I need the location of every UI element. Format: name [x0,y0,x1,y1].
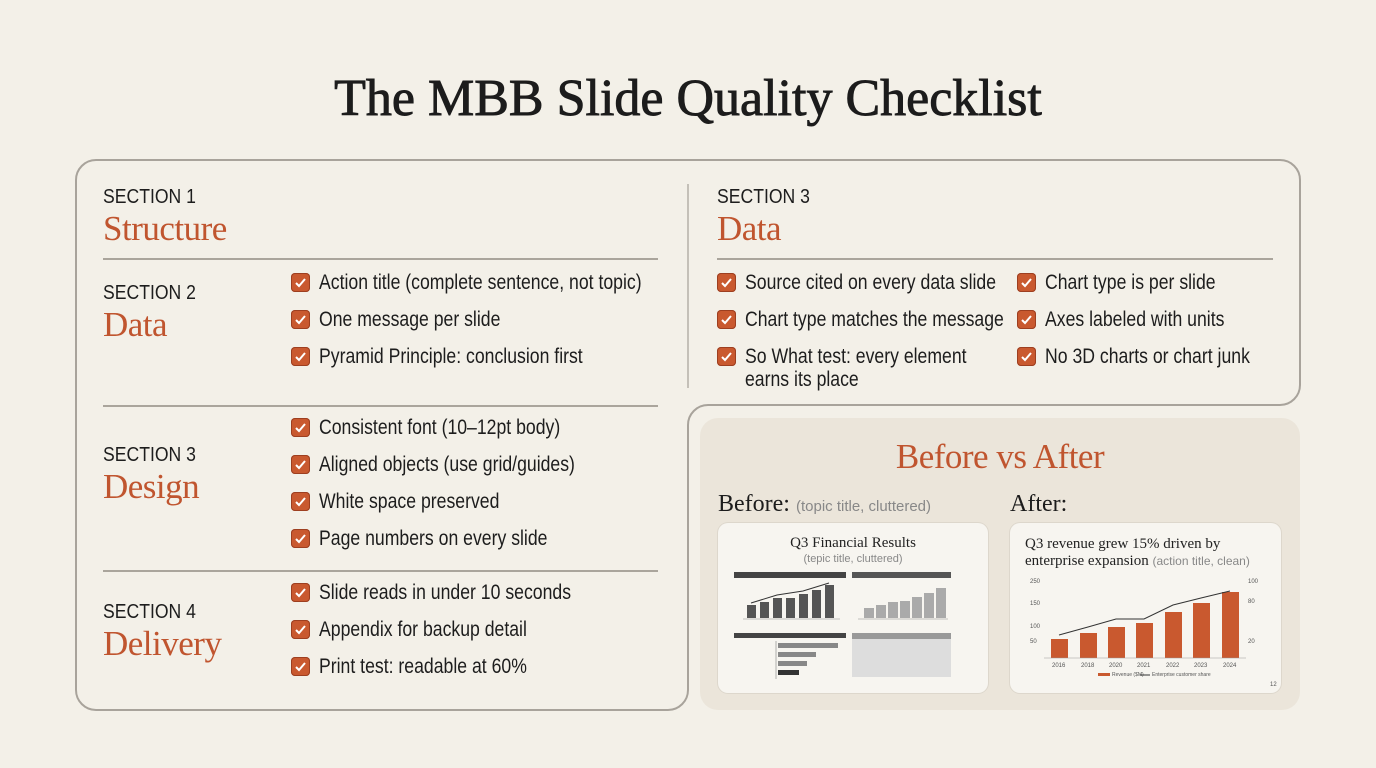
section 2 heading [103,282,196,344]
section 4 items [291,581,571,678]
section 4 items: Appendix for backup detail [319,618,527,641]
card: after slide: Revenue ($M) [1112,672,1144,678]
panel: before vs after [700,418,1300,710]
card: after slide: Enterprise customer share [1152,672,1211,678]
card: after slide: 250 [1030,579,1041,585]
section 2 heading: Data [103,305,167,344]
card: after slide: 2020 [1109,663,1123,669]
card: after slide: 100 [1248,579,1259,585]
section 2 items: Action title (complete sentence, not topic) [319,271,642,294]
card: after slide: 80 [1248,599,1255,605]
section 3 data heading: SECTION 3 [717,186,810,208]
section 1 heading: SECTION 1 [103,186,196,208]
card: after slide: 2018 [1081,663,1095,669]
section 3 design items: Aligned objects (use grid/guides) [319,453,575,476]
card: after slide: enterprise expansion (action title, clean) [1025,553,1250,569]
card: after slide: 2022 [1166,663,1180,669]
card: after slide: 12 [1270,682,1277,688]
section 4 heading [103,601,222,663]
section 3 data items: Chart type matches the message [745,308,1004,331]
card: after slide: 2021 [1137,663,1151,669]
after label: After: [1010,491,1067,517]
section 4 heading: SECTION 4 [103,601,196,623]
before vs after heading: Before vs After [896,437,1104,476]
card: after slide: 150 [1030,601,1041,607]
section 3 design items: Consistent font (10–12pt body) [319,416,560,439]
section 3 data heading [717,186,810,248]
section 3 design heading: SECTION 3 [103,444,196,466]
section 3 data items: Axes labeled with units [1045,308,1224,331]
card: before slide [718,523,988,693]
section 3 data items: Source cited on every data slide [745,271,996,294]
section 2 items [291,271,642,368]
section 2 items: One message per slide [319,308,500,331]
card: after slide: 2023 [1194,663,1208,669]
card: after slide: 2024 [1223,663,1237,669]
card: after slide: Q3 revenue grew 15% driven by [1025,536,1220,552]
section 3 data items: No 3D charts or chart junk [1045,345,1250,368]
card: before slide: Q3 Financial Results [790,535,916,551]
section 3 data heading: Data [717,209,781,248]
section 3 data items: So What test: every element [745,345,967,368]
section 3 data items: earns its place [745,368,859,391]
section 3 design heading: Design [103,467,199,506]
card: after slide: 100 [1030,624,1041,630]
card: after slide: 2016 [1052,663,1066,669]
card: before slide: (tepic title, cluttered) [803,553,903,565]
title: The MBB Slide Quality Checklist [334,70,1042,127]
section 3 design heading [103,444,200,506]
section 3 data items: Chart type is per slide [1045,271,1216,294]
section 3 design items: Page numbers on every slide [319,527,547,550]
section 4 items: Slide reads in under 10 seconds [319,581,571,604]
section 3 design items [291,416,575,550]
section 1 heading: Structure [103,209,227,248]
section 4 heading: Delivery [103,624,221,663]
section 1 heading [103,186,227,248]
section 3 design items: White space preserved [319,490,499,513]
card: after slide: 50 [1030,639,1037,645]
section 3 data items [717,271,1250,391]
section 2 heading: SECTION 2 [103,282,196,304]
before label: Before: (topic title, cluttered) [718,491,931,517]
card: after slide: 20 [1248,639,1255,645]
card: after slide [1010,523,1281,693]
section 4 items: Print test: readable at 60% [319,655,527,678]
section 2 items: Pyramid Principle: conclusion first [319,345,583,368]
